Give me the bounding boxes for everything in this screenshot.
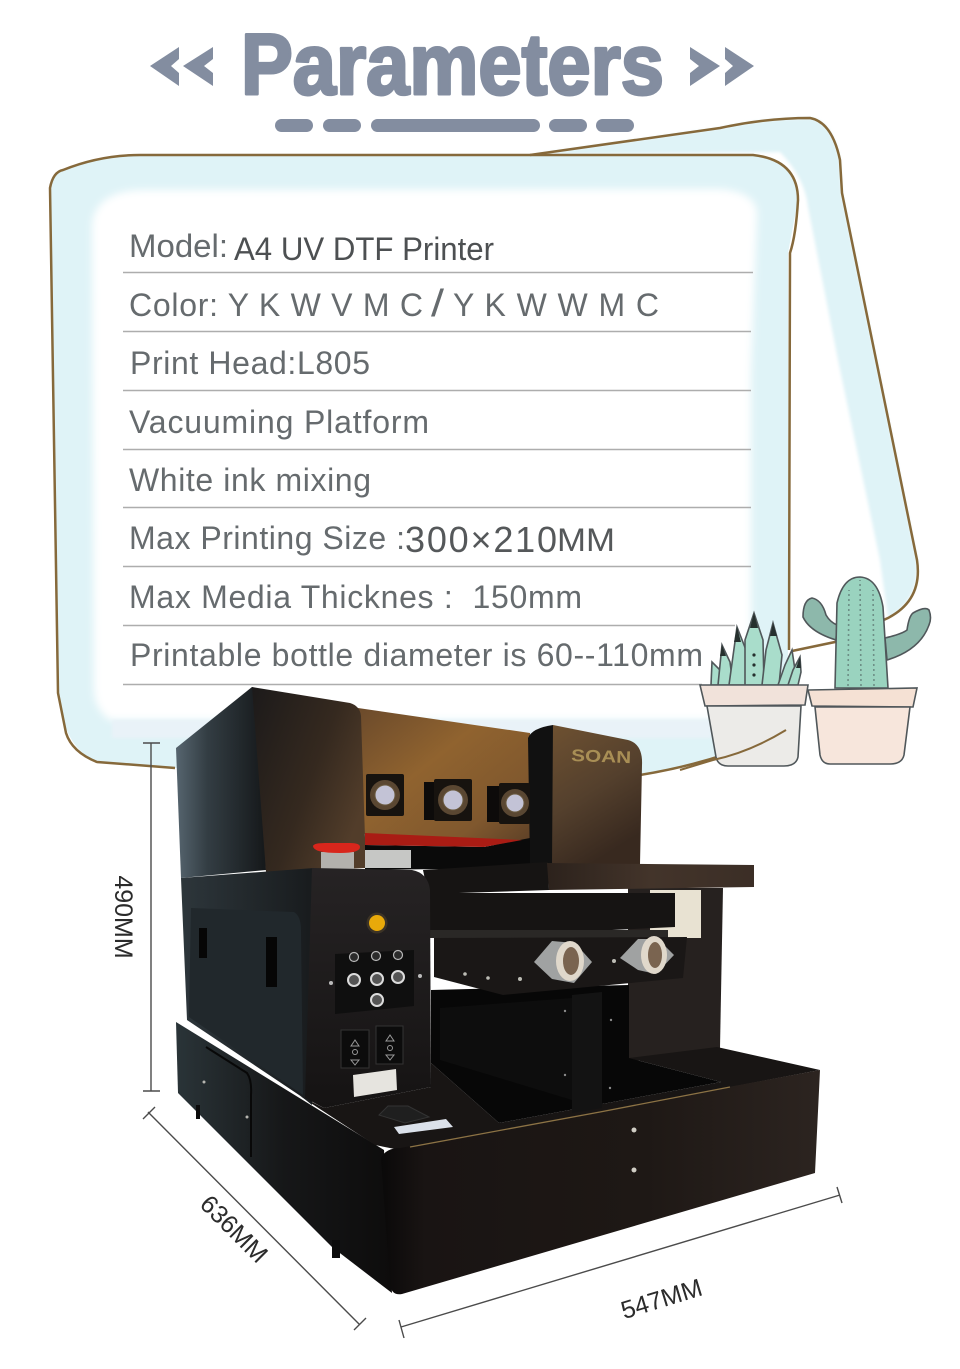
carriage gap xyxy=(428,930,668,938)
width label: 547MM xyxy=(618,1274,706,1325)
row: max printing size xyxy=(129,519,615,560)
width line xyxy=(399,1187,842,1338)
title underline dashes xyxy=(275,119,634,132)
row: max media thickness: Max Media Thicknes : 150mm xyxy=(129,579,582,615)
instruction sheet xyxy=(650,890,701,938)
base edge highlight xyxy=(410,1087,730,1147)
icon: potted cactus xyxy=(803,577,930,764)
base legs xyxy=(196,1105,340,1258)
base top xyxy=(300,1047,820,1150)
brand: SOAN: SOAN xyxy=(571,746,631,767)
left cover side xyxy=(176,687,266,878)
icon: right double chevrons xyxy=(690,47,754,86)
parameter list xyxy=(123,228,753,684)
height line xyxy=(143,743,160,1091)
pot rim xyxy=(808,688,917,707)
row: model: Model: xyxy=(129,228,228,264)
right cover front xyxy=(552,725,642,866)
carriage screws xyxy=(463,959,616,981)
lower carriage xyxy=(434,937,687,995)
row: model xyxy=(129,228,494,267)
red strip xyxy=(365,833,522,847)
row: color: Y K W W M C xyxy=(453,287,659,323)
cactus trunk xyxy=(835,577,888,688)
row: print head: Print Head:L805 xyxy=(130,345,370,381)
control tower front xyxy=(305,868,431,1108)
tray platform xyxy=(423,862,549,894)
interior opening xyxy=(431,985,721,1123)
succulent dark tips xyxy=(720,613,801,677)
interior screws xyxy=(564,1010,612,1089)
bearing right xyxy=(620,936,674,974)
rocker switches xyxy=(341,1026,403,1068)
row: vacuuming platform: Vacuuming Platform xyxy=(129,404,429,440)
door latches xyxy=(199,928,277,987)
succulent leaves xyxy=(711,613,801,685)
rear right column xyxy=(628,888,723,1062)
pot body xyxy=(815,707,910,764)
side hatch seam xyxy=(206,1047,251,1157)
pot body xyxy=(707,706,801,766)
dimension: width 547MM xyxy=(399,1187,842,1338)
fan 2 xyxy=(424,779,472,821)
front frame outline xyxy=(50,155,798,775)
side door xyxy=(189,908,303,1095)
emergency stop button xyxy=(313,843,360,869)
row: max printing size: MM xyxy=(557,522,615,558)
control tower side xyxy=(181,868,314,1105)
side screws xyxy=(202,1080,248,1118)
depth label: 636MM xyxy=(194,1190,273,1269)
control keypad xyxy=(329,950,422,1014)
back frame outline xyxy=(530,118,918,651)
printer photo xyxy=(176,687,820,1294)
row: color xyxy=(129,283,659,325)
heading text: Parameters xyxy=(241,17,664,113)
pot rim xyxy=(700,685,808,706)
tray front xyxy=(547,863,754,890)
icon: potted succulent xyxy=(700,613,808,766)
fans xyxy=(366,774,530,824)
print opening xyxy=(365,838,530,870)
row: max printing size: 300×210 xyxy=(405,519,557,560)
bearing left xyxy=(534,941,592,983)
upper carriage xyxy=(428,893,675,935)
row: bottle diameter: Printable bottle diameter is 60--110mm xyxy=(130,637,703,673)
interior back wall xyxy=(440,998,572,1100)
fan 3 xyxy=(487,783,530,824)
silver rail block xyxy=(365,850,411,868)
cactus arms xyxy=(803,598,930,660)
yellow indicator button xyxy=(366,912,388,934)
height label: 490MM xyxy=(109,875,137,959)
front frame blue fill xyxy=(50,155,798,775)
title: Parameters xyxy=(150,17,754,132)
base screws xyxy=(632,1128,636,1172)
row: color: / xyxy=(431,283,445,325)
dimension: depth 636MM xyxy=(143,1107,366,1330)
back frame blue band xyxy=(530,118,917,618)
frame line crossing succulent pot xyxy=(680,730,786,770)
row divider lines xyxy=(123,272,753,684)
dimension: height 490MM xyxy=(109,743,160,1091)
pale lower fade xyxy=(112,720,712,738)
interior support xyxy=(572,992,602,1113)
depth line xyxy=(143,1107,366,1330)
fan 1 xyxy=(366,774,404,816)
base power switch xyxy=(379,1106,429,1123)
row: model: A4 UV DTF Printer xyxy=(234,231,494,267)
row: color: Color: Y K W V M C xyxy=(129,287,423,323)
row: max printing size: Max Printing Size : xyxy=(129,520,405,556)
left cover front xyxy=(252,687,366,872)
inner white area xyxy=(92,189,757,720)
base side xyxy=(176,1022,392,1293)
icon: left double chevrons xyxy=(150,47,213,86)
base blue label xyxy=(394,1119,453,1134)
switch label xyxy=(353,1069,397,1097)
back panel xyxy=(358,708,532,848)
panel: parameter card frame xyxy=(50,118,918,775)
cactus ribs xyxy=(848,580,874,686)
row: white ink mixing: White ink mixing xyxy=(129,462,371,498)
base front xyxy=(381,1070,820,1294)
right cover black strip xyxy=(528,725,554,866)
